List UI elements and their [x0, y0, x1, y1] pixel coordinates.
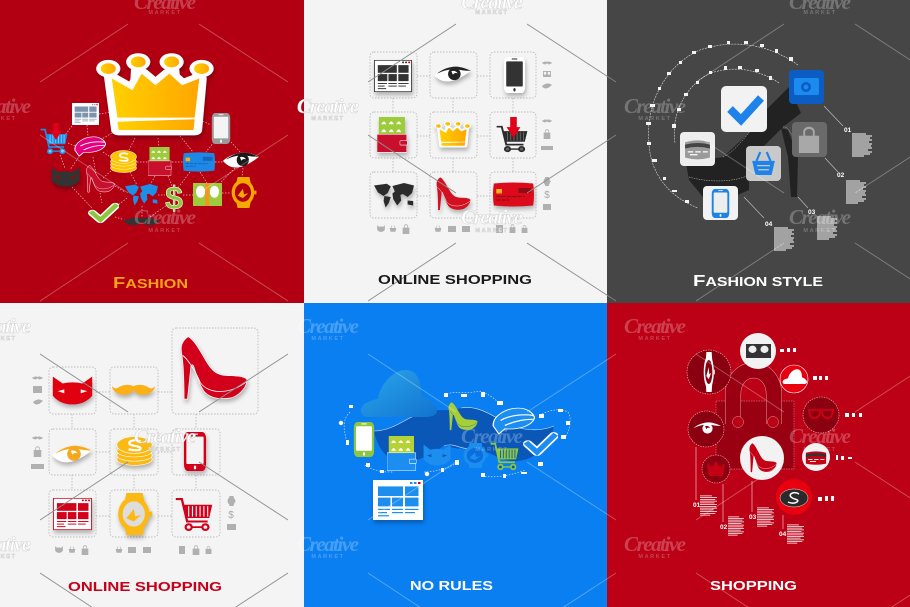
icon: eye: [52, 446, 92, 462]
icon: big red high heel: [181, 337, 247, 399]
Creative Market watermarks: Creative: [297, 94, 359, 118]
icon: moustache: [112, 385, 155, 395]
callout 01: [693, 496, 717, 515]
icon: red cat mask: [53, 377, 92, 404]
Creative Market watermarks: MARKET: [148, 228, 182, 234]
icon: red high heel: [87, 165, 114, 192]
panel: online shopping dark: [304, 0, 607, 303]
icon: large crown: [96, 53, 214, 130]
panel: Shopping: [607, 303, 910, 607]
icon: coin stack: [117, 437, 152, 465]
icon slots grid: [370, 52, 536, 218]
callout 01: 01: [693, 502, 701, 509]
heading: ONLINE SHOPPING: [378, 272, 532, 287]
Creative Market watermarks: Creative: [461, 205, 523, 229]
watermark lines: [0, 303, 304, 607]
icon: phone: [504, 57, 525, 93]
icon: web page: [374, 480, 422, 520]
icon: world map: [374, 183, 414, 208]
callout 04: 04: [779, 531, 787, 538]
callout 03: 03: [808, 209, 816, 216]
icon: watch: [464, 443, 488, 468]
Creative Market watermarks: MARKET: [311, 116, 345, 122]
Creative Market watermarks: MARKET: [475, 228, 509, 234]
icon: green check: [92, 206, 115, 220]
dashed orbit arcs: [648, 44, 798, 208]
shopping bag backdrop: [716, 370, 794, 469]
panel: online shopping red: [0, 303, 304, 607]
Creative Market watermarks: MARKET: [148, 447, 182, 453]
Creative Market watermarks: MARKET: [638, 554, 672, 560]
icon: moustache: [123, 217, 160, 225]
icon: red phone: [184, 432, 206, 471]
heading: FASHION: [113, 275, 188, 292]
Creative Market watermarks: MARKET: [803, 228, 837, 234]
Creative Market watermarks: MARKET: [311, 336, 345, 342]
Creative Market watermarks: Creative: [624, 94, 686, 118]
callout 02: [837, 172, 866, 203]
icon: cart with arrow: [497, 117, 527, 151]
icon: web page: [374, 60, 412, 92]
icon: red credit card: [493, 182, 534, 206]
icon: crown: [435, 121, 471, 146]
icon: web page: [53, 498, 92, 530]
callout 04: 04: [765, 221, 773, 228]
icon tile: check: [721, 86, 767, 132]
Creative Market watermarks: Creative: [789, 205, 851, 229]
icon: phone: [212, 113, 230, 144]
small white icons on arcs: [646, 41, 793, 203]
callout 02: [720, 517, 744, 535]
circle: banknote: [740, 333, 776, 369]
panel: No rules: [304, 303, 607, 607]
callout 03: 03: [749, 514, 757, 521]
heading: NO RULES: [410, 578, 493, 593]
icon tile: camera: [789, 70, 824, 104]
callout 04: [765, 221, 794, 250]
icon: coin stack: [111, 150, 136, 173]
Creative Market watermarks: Creative: [461, 424, 523, 448]
callout 02: 02: [837, 172, 845, 179]
Creative Market watermarks: Creative: [134, 205, 196, 229]
Creative Market watermarks: MARKET: [311, 554, 345, 560]
icon: wallet: [148, 147, 172, 175]
icon: cloud: [361, 370, 437, 417]
watermark lines: [0, 0, 304, 303]
icon tile: phone: [703, 186, 738, 220]
icon: eye: [434, 67, 471, 82]
network connectors: [60, 112, 243, 220]
icon: blue cart with red arrow: [41, 123, 67, 153]
icon: blue cat: [424, 444, 450, 466]
callout 01: [844, 127, 872, 156]
Creative Market watermarks: MARKET: [638, 116, 672, 122]
Creative Market watermarks: Creative: [624, 532, 686, 556]
icon: world map: [125, 184, 158, 206]
leader lines: [744, 106, 843, 218]
circle: cloud: [780, 365, 808, 393]
icon: dollar sign: $: [165, 180, 183, 216]
watermark lines: [607, 0, 910, 303]
Creative Market watermarks: Creative: [297, 532, 359, 556]
icon: wallet: [387, 436, 416, 470]
callout 02: 02: [720, 524, 728, 531]
Creative Market watermarks: MARKET: [148, 10, 182, 16]
circle: coin: [776, 479, 812, 515]
Creative Market watermarks: MARKET: [803, 447, 837, 453]
heading: FASHION STYLE: [693, 273, 823, 290]
leader lines: [696, 447, 783, 529]
icon: red cart: [176, 499, 212, 530]
Creative Market watermarks: Creative: [624, 314, 686, 338]
wave outline: [374, 407, 554, 448]
small grey icons: $: [544, 190, 550, 201]
icon: credit card: [183, 152, 215, 172]
icon: lime high heel: [449, 402, 477, 430]
small white icons: [780, 348, 862, 501]
icon tile: shopping bag: [792, 122, 827, 157]
panel: Fashion style: [607, 0, 910, 303]
circle: jar: [802, 443, 830, 471]
black high heel: [686, 87, 801, 197]
Creative Market watermarks: MARKET: [803, 10, 837, 16]
small white icons and dashed links: [339, 391, 570, 478]
panel: Fashion: [0, 0, 304, 303]
icon: check: [528, 436, 554, 452]
Creative Market watermarks: Creative: [789, 424, 851, 448]
heading: SHOPPING: [710, 578, 797, 593]
Creative Market watermarks: MARKET: [475, 447, 509, 453]
icon tile: jar: [680, 132, 715, 166]
icon: web page: [72, 103, 99, 125]
heading: ONLINE SHOPPING: [68, 579, 222, 594]
callout 01: 01: [844, 127, 852, 134]
icon slots grid: [49, 328, 258, 537]
watermark lines: [304, 0, 607, 303]
Creative Market watermarks: MARKET: [475, 10, 509, 16]
small grey icons: [377, 62, 553, 234]
callout 04: [779, 525, 804, 543]
circle: crown: [702, 455, 730, 483]
circle: high heel: [740, 436, 784, 480]
icon: wallet: [377, 117, 407, 152]
Creative Market watermarks: Creative: [134, 424, 196, 448]
watermark lines: [607, 303, 910, 607]
callout 03: [808, 209, 837, 239]
icon: pink cap: [75, 137, 106, 156]
icon: watch: [118, 493, 152, 535]
Creative Market watermarks: Creative: [297, 314, 359, 338]
icon: watch: [232, 177, 256, 208]
watermark lines: [304, 303, 607, 607]
icon: red high heel: [437, 177, 470, 210]
icon tile: basket: [746, 146, 781, 181]
callout 03: [749, 508, 774, 526]
icon: banknotes: [193, 183, 222, 206]
circle: watch: [687, 350, 731, 394]
circle: eye: [688, 411, 724, 447]
small grey icons: $: [228, 510, 234, 521]
icon: eye: [223, 153, 259, 168]
icon: cat mask: [52, 167, 79, 187]
icon: green phone: [354, 422, 374, 457]
icon: lime cart: [491, 444, 518, 469]
Creative Market watermarks: MARKET: [638, 336, 672, 342]
small grey icons: [31, 377, 236, 555]
icon: blue cap: [493, 408, 535, 434]
dark blue wave: [374, 407, 554, 462]
circle: glasses: [803, 397, 839, 433]
